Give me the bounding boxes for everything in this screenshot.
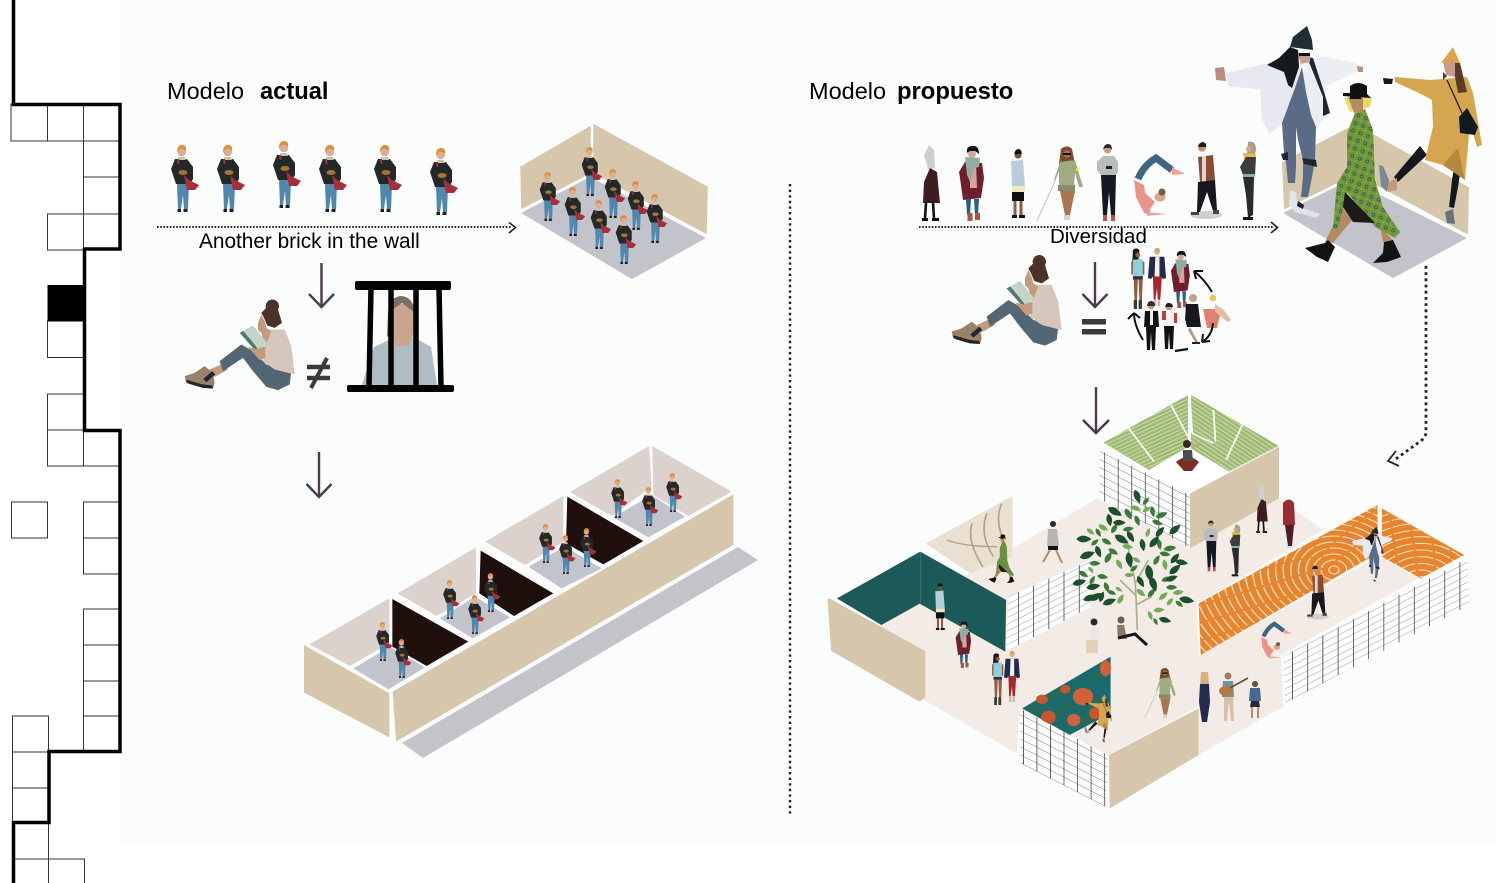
tree (1072, 489, 1195, 630)
figure: girl in denim jacket (1249, 681, 1261, 718)
arrow down 3 (1082, 262, 1108, 307)
equals sign (1082, 319, 1106, 334)
caption: Another brick in the wall: Another brick in the wall (199, 230, 420, 253)
teal walls (837, 552, 1006, 652)
arrow down 4 (1083, 387, 1109, 433)
vertical dotted divider (789, 184, 791, 816)
figures: seated pair under tree (1086, 616, 1147, 653)
title: Modelo propuesto: propuesto (897, 78, 1013, 105)
dotted arrow: diversity row to room (919, 222, 1278, 233)
isometric proposed floor plan (829, 395, 1512, 808)
room with uniform students (521, 125, 707, 278)
figure: guitar player (1219, 672, 1248, 721)
figure: green coat walker (988, 534, 1014, 583)
figure: striped sweater walker (1043, 521, 1062, 563)
icon: person behind bars (347, 281, 454, 392)
title: Modelo propuesto: Modelo (809, 78, 886, 104)
figure: woman in mustard coat (1379, 47, 1482, 224)
students in block (376, 473, 682, 678)
marble wall (926, 496, 1012, 573)
orange fingerprint walls (1169, 440, 1512, 700)
block structure (304, 446, 733, 742)
row of diverse people (922, 142, 1256, 221)
reader figure (right) (952, 255, 1062, 346)
rooftop floor (1149, 448, 1229, 493)
grid wall of tower (1099, 450, 1190, 548)
room with large diverse figures (1215, 26, 1482, 277)
reader figure (left) (185, 299, 295, 390)
tan wall of tower (1190, 447, 1279, 548)
long grid wall (1283, 558, 1469, 703)
pomegranate wall (1022, 657, 1111, 735)
figure: woman in green patterned coat (1305, 83, 1401, 263)
figure: woman in black (1185, 294, 1201, 344)
row of identical students (171, 141, 458, 215)
caption: Diversidad: Diversidad (1050, 225, 1147, 248)
tan wall bottom (1109, 708, 1199, 808)
figure: red hood (1283, 500, 1295, 548)
figure: seated blonde (1203, 295, 1231, 328)
figure: woman in white fur jacket (1215, 26, 1363, 218)
floor (879, 498, 1419, 755)
isometric classroom row block (304, 446, 758, 758)
plan structure (829, 395, 1512, 808)
figure: woman with long hair (1199, 672, 1210, 722)
arrow down 2 (306, 452, 332, 497)
ground shadow (402, 547, 758, 758)
tan wall left (829, 600, 924, 700)
dotted arrow: actual row to room (157, 222, 516, 233)
circle of people with cycle arrows (1128, 248, 1231, 351)
people in plan (935, 440, 1393, 742)
not equal sign (307, 358, 330, 388)
title: Modelo actual: actual (260, 79, 328, 105)
bottom grid wall (1020, 708, 1108, 807)
decorative brick grid strip (11, 0, 120, 883)
dotted arrow: room to proposed plan (1388, 266, 1426, 466)
arrow down 1 (309, 263, 334, 307)
figure: kid with red sleeves (1162, 303, 1177, 349)
leaf pattern walls on roof (1103, 395, 1279, 472)
figure: man in black (1144, 301, 1159, 350)
figure: seated on roof (1176, 440, 1200, 471)
title: Modelo actual: Modelo (167, 78, 244, 104)
grid wall beside marble (1006, 560, 1091, 652)
